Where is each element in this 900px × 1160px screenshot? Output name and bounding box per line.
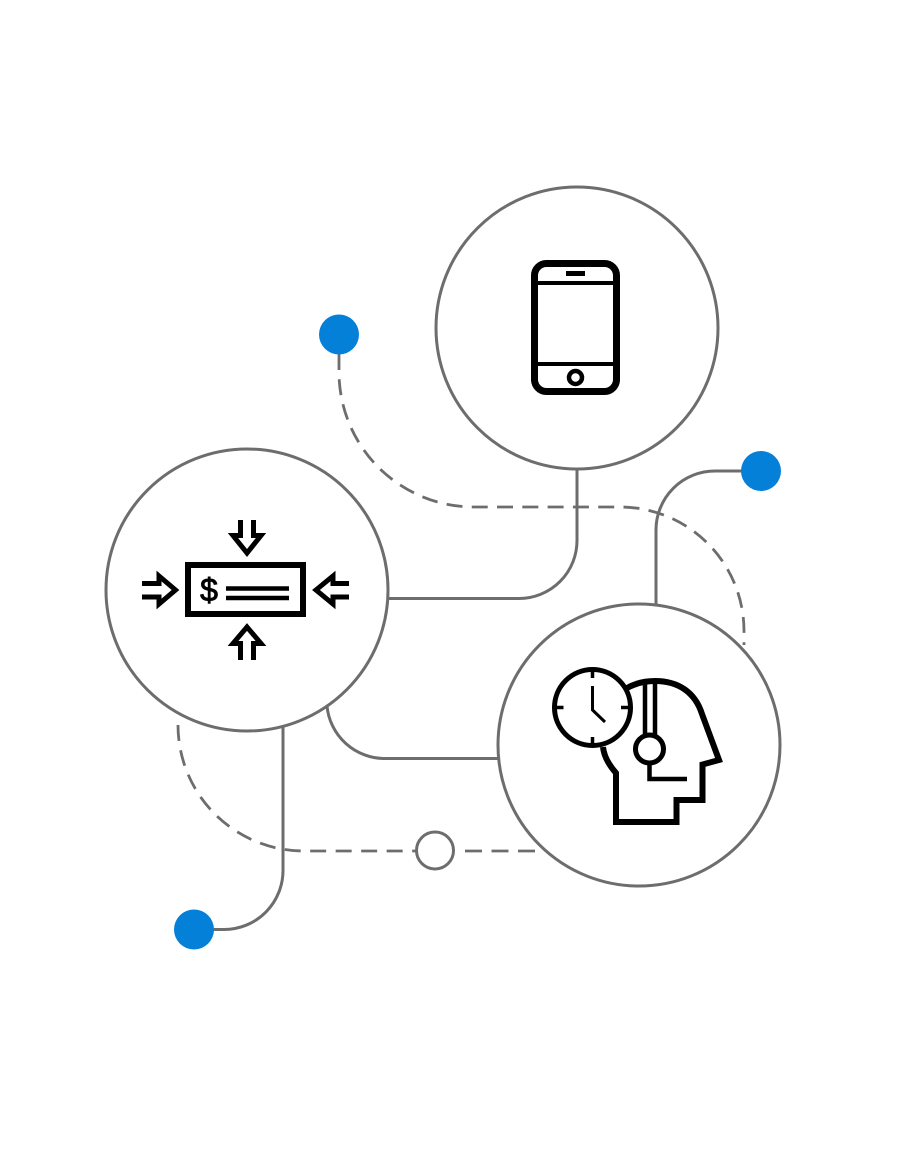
connector: check to bottom left dot <box>210 727 283 930</box>
blue dot: top <box>319 314 359 354</box>
panel: payment check <box>106 449 388 731</box>
arrow: top <box>233 520 261 553</box>
agent circle <box>498 604 780 886</box>
connector: check to headset <box>327 706 498 759</box>
dashed connector: check to small circle <box>178 725 416 851</box>
arrow: bottom <box>233 627 261 660</box>
icon: clock <box>554 670 630 746</box>
check circle <box>106 449 388 731</box>
panel: phone <box>436 187 718 469</box>
icon: check with inward arrows <box>142 520 349 660</box>
blue dot: right <box>741 451 781 491</box>
connector: headset to top right dot <box>656 471 745 604</box>
dashed connector: small circle to headset <box>465 850 535 852</box>
panel: headset agent <box>498 604 780 886</box>
small hollow circle <box>416 832 454 869</box>
icon: head with headset <box>603 681 719 822</box>
dollar sign: $ <box>200 572 218 608</box>
connector: phone to check <box>388 468 577 599</box>
blue dot: bottom left <box>174 910 214 950</box>
icon: smartphone <box>534 264 617 392</box>
arrow: right <box>316 576 349 604</box>
phone circle <box>436 187 718 469</box>
arrow: left <box>142 576 176 604</box>
dashed connector: top dot to headset <box>339 354 744 645</box>
